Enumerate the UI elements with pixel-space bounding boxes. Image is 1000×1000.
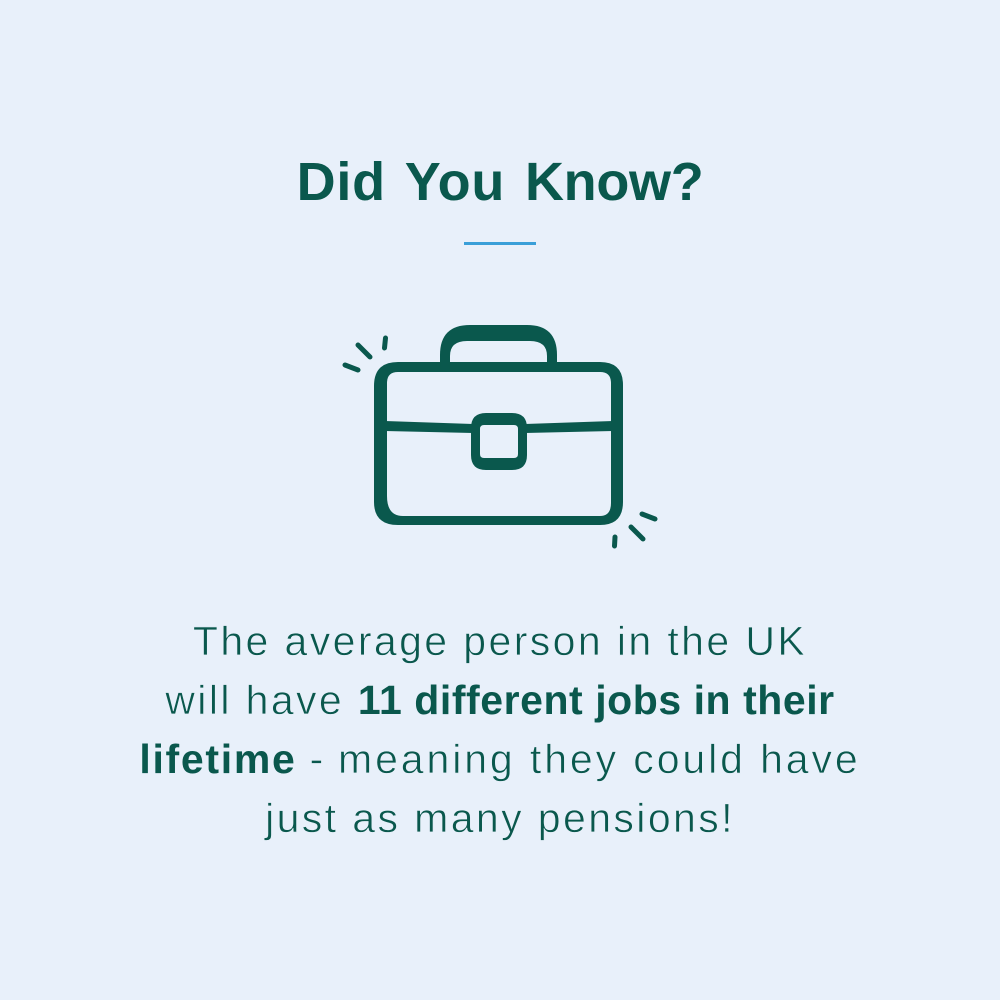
body text: The average person in the UK	[193, 618, 807, 664]
body text: will have 11 different jobs in their	[165, 677, 835, 723]
title: Did You Know?	[297, 152, 703, 212]
strap	[385, 421, 613, 433]
sparkle bottom-right	[614, 514, 655, 546]
body text: just as many pensions!	[265, 795, 735, 841]
handle feet	[440, 362, 557, 372]
icon: briefcase	[342, 325, 658, 548]
clasp	[471, 413, 527, 470]
accent underline	[464, 242, 536, 245]
sparkle top-left	[345, 338, 386, 370]
case body	[374, 362, 623, 525]
body text: lifetime - meaning they could have	[139, 736, 861, 782]
body text	[139, 618, 861, 841]
handle	[440, 325, 557, 364]
